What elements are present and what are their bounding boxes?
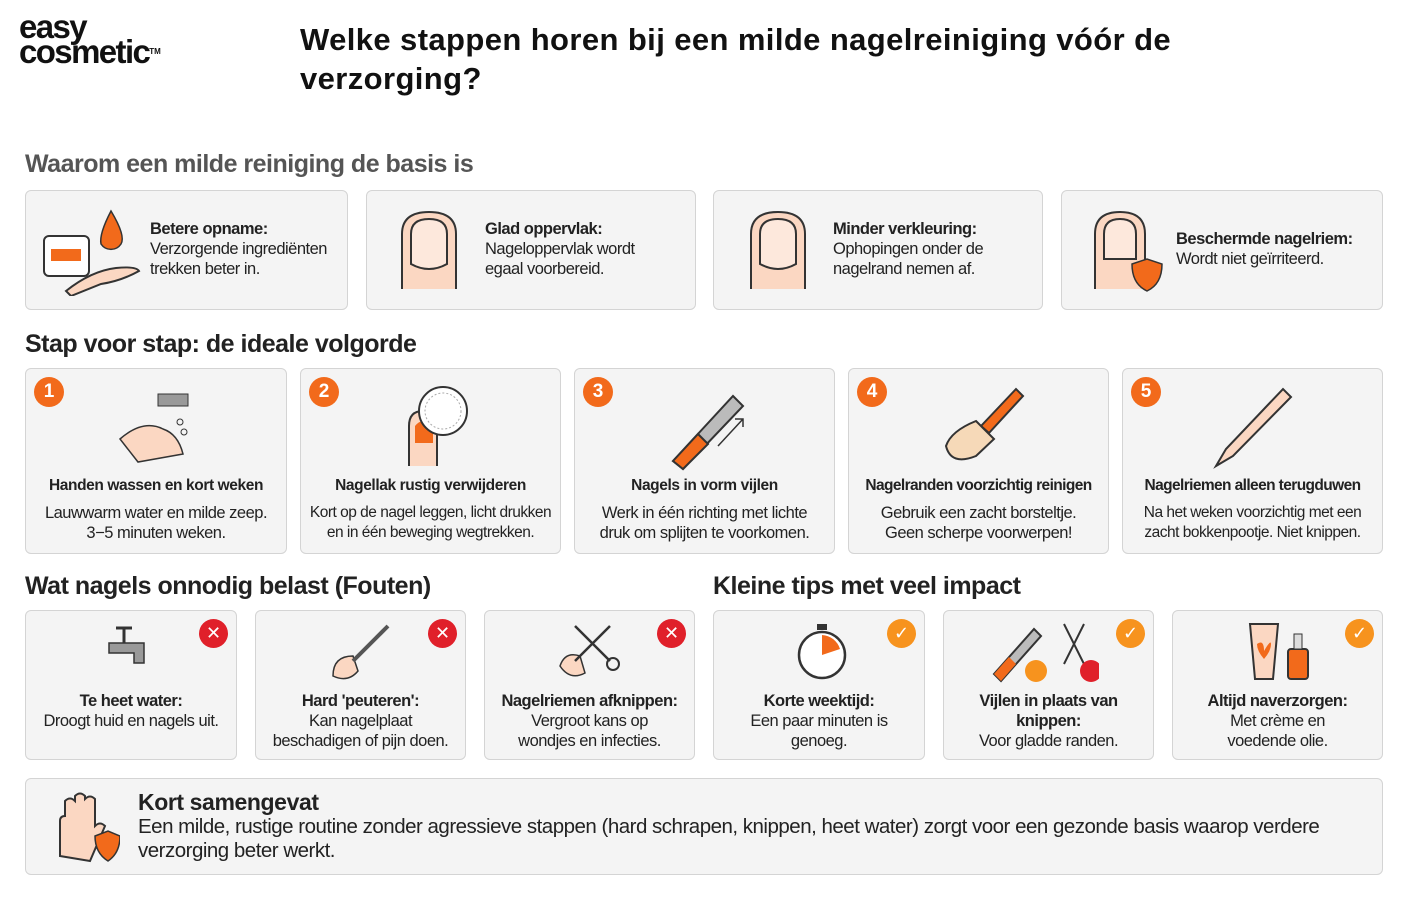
step 4: 4 <box>867 381 877 402</box>
logo: cosmeticTM <box>19 33 161 70</box>
step 3 <box>574 368 835 554</box>
heading: why: Waarom een milde reiniging de basis is <box>25 150 473 178</box>
card: glad oppervlak: egaal voorbereid. <box>485 260 604 278</box>
tip 3: Met crème en <box>1230 712 1325 730</box>
step 4: Gebruik een zacht borsteltje. <box>881 504 1076 522</box>
tip 1: Korte weektijd: <box>764 692 874 710</box>
step 1: Handen wassen en kort weken <box>49 477 263 494</box>
card: beschermde nagelriem <box>1061 190 1383 310</box>
panel: summary <box>25 778 1383 875</box>
card: betere opname: trekken beter in. <box>150 260 260 278</box>
step 3: 3 <box>593 381 603 402</box>
step 3: druk om splijten te voorkomen. <box>600 524 809 542</box>
logo: easy <box>19 8 86 45</box>
step 3: Nagels in vorm vijlen <box>631 477 778 494</box>
panel: steps <box>25 368 1383 554</box>
step 5: Nagelriemen alleen terugduwen <box>1144 477 1361 494</box>
summary text: Kort samengevat <box>138 789 319 815</box>
heading: steps: Stap voor stap: de ideale volgorde <box>25 330 416 358</box>
step 1: 1 <box>44 381 54 402</box>
heading: tips: Kleine tips met veel impact <box>713 572 1020 600</box>
tip 2: ✓ <box>1123 623 1138 644</box>
tip 2: Vijlen in plaats van <box>979 692 1118 710</box>
mistake 2 <box>255 610 466 760</box>
mistake 1: ✕ <box>206 623 221 644</box>
tip 3 <box>1172 610 1383 760</box>
tip 3: ✓ <box>1352 623 1367 644</box>
heading: mistakes: Wat nagels onnodig belast (Fouten) <box>25 572 431 600</box>
step 1: 3−5 minuten weken. <box>86 524 226 542</box>
card: beschermde nagelriem: Beschermde nagelriem: <box>1176 230 1353 248</box>
card: betere opname <box>25 190 348 310</box>
mistake 2: Hard 'peuteren': <box>302 692 419 710</box>
mistake 3: ✕ <box>664 623 679 644</box>
step 4: Geen scherpe voorwerpen! <box>885 524 1072 542</box>
tip 3: voedende olie. <box>1227 732 1328 750</box>
tip 2: knippen: <box>1016 712 1081 730</box>
mistake 1: Te heet water: <box>80 692 182 710</box>
tip 2 <box>943 610 1154 760</box>
mistake 2: ✕ <box>435 623 450 644</box>
mistake 2: Kan nagelplaat <box>309 712 412 730</box>
card: betere opname: Verzorgende ingrediënten <box>150 240 327 258</box>
mistake 1: Droogt huid en nagels uit. <box>43 712 219 730</box>
mistake 1 <box>25 610 237 760</box>
tip 1: ✓ <box>894 623 909 644</box>
summary text <box>138 789 1319 862</box>
card: glad oppervlak: Nageloppervlak wordt <box>485 240 635 258</box>
step 2: en in één beweging wegtrekken. <box>327 524 534 541</box>
step 2: Nagellak rustig verwijderen <box>335 477 526 494</box>
tip 1: genoeg. <box>791 732 847 750</box>
card: minder verkleuring: nagelrand nemen af. <box>833 260 975 278</box>
logo <box>19 8 161 70</box>
card: beschermde nagelriem: Wordt niet geïrriteerd. <box>1176 250 1324 268</box>
title: Welke stappen horen bij een milde nagelreiniging vóór de verzorging? <box>300 22 1171 96</box>
step 2: Kort op de nagel leggen, licht drukken <box>310 504 551 521</box>
mistake 2: beschadigen of pijn doen. <box>273 732 448 750</box>
mistake 3 <box>484 610 695 760</box>
panel: mistakes and tips <box>25 610 1383 760</box>
mistake 3: wondjes en infecties. <box>518 732 661 750</box>
step 5: 5 <box>1141 381 1151 402</box>
step 1: Lauwwarm water en milde zeep. <box>45 504 267 522</box>
tip 2: Voor gladde randen. <box>979 732 1118 750</box>
tip 1 <box>713 610 925 760</box>
card: betere opname: Betere opname: <box>150 220 268 238</box>
step 5: zacht bokkenpootje. Niet knippen. <box>1144 524 1361 541</box>
card: minder verkleuring: Ophopingen onder de <box>833 240 983 258</box>
tip 1: Een paar minuten is <box>750 712 888 730</box>
card: glad oppervlak <box>366 190 696 310</box>
card: glad oppervlak: Glad oppervlak: <box>485 220 602 238</box>
step 2 <box>300 368 561 554</box>
summary text: Een milde, rustige routine zonder agressieve stappen (hard schrapen, knippen, heet water) zorgt voor een gezonde basis waarop verdere verzorging beter werkt. <box>138 815 1319 862</box>
step 1 <box>25 368 287 554</box>
card: minder verkleuring: Minder verkleuring: <box>833 220 977 238</box>
tip 3: Altijd naverzorgen: <box>1208 692 1347 710</box>
card: minder verkleuring <box>713 190 1043 310</box>
icon: hand shield <box>59 792 120 862</box>
step 2: 2 <box>319 381 329 402</box>
step 5: Na het weken voorzichtig met een <box>1144 504 1361 521</box>
panel: benefits <box>25 190 1383 310</box>
step 4 <box>848 368 1109 554</box>
step 5 <box>1122 368 1383 554</box>
mistake 3: Vergroot kans op <box>531 712 648 730</box>
step 4: Nagelranden voorzichtig reinigen <box>865 477 1092 494</box>
step 3: Werk in één richting met lichte <box>602 504 807 522</box>
mistake 3: Nagelriemen afknippen: <box>501 692 678 710</box>
